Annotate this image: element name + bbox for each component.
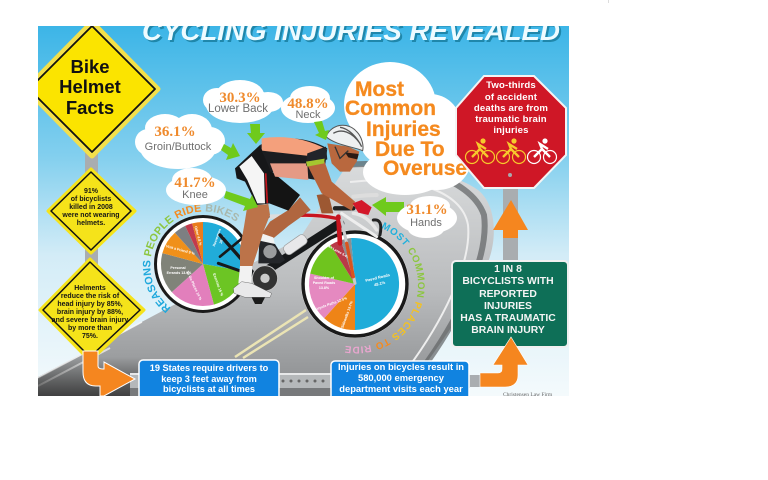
arrow: hands (372, 197, 404, 216)
curved label: most common places to ride: MOST COMMON PLACES TO RIDE (345, 222, 425, 354)
near arm (307, 160, 355, 211)
heading: most common injuries: Common (345, 97, 436, 120)
bike frame (218, 195, 381, 283)
callout: hands (397, 196, 457, 238)
stop sign: injuries (493, 125, 529, 136)
callout: lower back: Lower Back (208, 103, 268, 115)
green sign: REPORTED (479, 289, 537, 300)
arrow: up to stop sign (493, 200, 528, 238)
blue box: emergency visits: Injuries on bicycles result in (338, 361, 464, 372)
blue box: emergency visits (331, 361, 469, 401)
road (38, 164, 494, 396)
stop sign: Two-thirds (486, 80, 536, 91)
sign: 91 percent: helmets. (77, 220, 105, 227)
wheel pie: reasons people ride bikes: Visit a Friend 9 % (165, 244, 196, 256)
big cloud (344, 62, 471, 195)
crankset (252, 266, 278, 291)
near shorts (235, 145, 270, 205)
wheel pie: reasons people ride bikes (154, 215, 252, 313)
icon: yellow cyclist (466, 139, 494, 164)
sign: 91 percent: 91% (84, 188, 99, 195)
callout: groin (135, 114, 225, 169)
sign: helmets reduce: by more than (68, 325, 112, 332)
cyclist and bike (218, 125, 381, 304)
head (327, 143, 359, 172)
stop sign (456, 76, 566, 188)
sign: helmets reduce: and severe brain injury (52, 317, 128, 324)
stop sign: deaths are from (474, 103, 548, 114)
wheel pie: reasons people ride bikes: Recreation (212, 228, 222, 247)
heading: most common injuries: Injuries (366, 118, 441, 141)
sign: 91 percent (48, 169, 135, 253)
title: CYCLING INJURIES REVEALED (142, 16, 560, 46)
wheel pie: most common places to ride: 13.8% (319, 286, 330, 290)
sleeve (306, 147, 327, 167)
arrow: lower back (247, 124, 265, 144)
icon: white cyclist (528, 139, 556, 164)
icon: yellow cyclist 2 (496, 139, 526, 164)
heading: most common injuries: Overuse (383, 157, 467, 180)
blue box: 19 states: keep 3 feet away from (161, 374, 257, 384)
infographic (38, 0, 609, 396)
sign: helmets reduce: reduce the risk of (61, 293, 120, 300)
blue box: emergency visits: department visits each year (339, 383, 463, 394)
sign posts (85, 150, 518, 387)
callout: hands: Hands (410, 217, 442, 229)
near leg (240, 204, 270, 267)
guard rail (130, 373, 470, 396)
green sign: BRAIN INJURY (471, 325, 545, 336)
blue box: 19 states: bicyclists at all times (163, 384, 255, 394)
curved label: reasons people ride bikes: REASONS PEOPLE RIDE BIKES (142, 204, 239, 314)
credit: Christensen Law Firm (503, 392, 553, 398)
shorts far (269, 170, 300, 211)
sign: helmets reduce (40, 259, 144, 361)
jersey (260, 138, 330, 180)
heading: most common injuries (345, 78, 467, 180)
title (143, 26, 562, 42)
sign: bike helmet facts: Bike (70, 56, 110, 77)
stop sign: traumatic brain (475, 114, 547, 125)
sign: helmets reduce: brain injury by 88%, (57, 309, 123, 316)
wheel pie: most common places to ride: Shoulder of (314, 276, 335, 280)
callout: lower back: 30.3% (219, 90, 261, 106)
sign: helmets reduce: head injury by 85%, (57, 301, 123, 308)
green sign: BICYCLISTS WITH (462, 276, 554, 287)
sign: bike helmet facts: Helmet (59, 76, 121, 97)
heading: most common injuries: Due To (375, 138, 445, 161)
callout: knee (166, 168, 226, 205)
title: CYCLING INJURIES REVEALED (144, 18, 562, 48)
callout: neck: Neck (295, 109, 321, 121)
sign: 91 percent: killed in 2008 (69, 204, 113, 211)
wheel pie: most common places to ride: 48.1% (374, 280, 386, 287)
sign: 91 percent: were not wearing (61, 212, 120, 219)
heading: most common injuries: Most (355, 78, 404, 101)
water bottle (283, 234, 308, 255)
far arm (317, 193, 333, 213)
wheel pie: reasons people ride bikes: To Go Places 14 % (185, 270, 203, 302)
callout: groin: 36.1% (154, 124, 196, 140)
stop sign: of accident (485, 92, 538, 103)
wheel pie: reasons people ride bikes: Personal (170, 266, 186, 270)
green sign (452, 261, 568, 347)
wheel pie: reasons people ride bikes: Errands 13.9% (167, 271, 192, 275)
wheel pie: most common places to ride (301, 230, 409, 338)
sign: bike helmet facts: Facts (66, 97, 114, 118)
callout: knee: 41.7% (174, 175, 216, 191)
callout: hands: 31.1% (406, 202, 448, 218)
callout: groin: Groin/Buttock (145, 141, 212, 153)
wheel pie: reasons people ride bikes: Other 4.8 % (193, 226, 203, 247)
sign: 91 percent: of bicyclists (71, 196, 111, 203)
glove (353, 200, 372, 215)
sign: helmets reduce: Helments (74, 285, 106, 292)
blue box: 19 states: 19 States require drivers to (150, 363, 269, 373)
wheel pie: reasons people ride bikes: Exercise 15 % (212, 273, 224, 297)
green sign: INJURIES (484, 301, 532, 312)
green sign: 1 IN 8 (494, 264, 522, 275)
wheel pie: most common places to ride: Sidewalks 13.7% (340, 300, 354, 329)
far leg (262, 197, 311, 238)
green sign: HAS A TRAUMATIC (460, 313, 556, 324)
callout: neck (281, 86, 335, 123)
callout: neck: 48.8% (287, 96, 329, 112)
blue box: 19 states (139, 360, 279, 400)
sign: helmets reduce: 75%. (82, 333, 98, 340)
helmet (326, 125, 363, 151)
callout: knee: Knee (182, 189, 208, 201)
arrow: groin (221, 143, 240, 160)
arrow: orange to blue box (83, 351, 135, 396)
blue box: emergency visits: 580,000 emergency (358, 372, 445, 383)
wheel pie: most common places to ride: Bicycle Paths 12.5% (314, 296, 348, 312)
arrow: knee (224, 191, 258, 211)
arrow: neck (314, 121, 329, 140)
wheel pie: most common places to ride: Paved Roads (365, 272, 391, 283)
arrow: orange up to green sign (480, 337, 528, 387)
wheel pie: most common places to ride: Paved Roads (313, 281, 335, 285)
wheel pie: most common places to ride: Bike Lanes 5.4% (325, 243, 350, 260)
far shoe (258, 233, 285, 263)
sign: bike helmet facts (26, 22, 158, 156)
callout: lower back (203, 80, 283, 123)
near shoe (233, 282, 272, 304)
wheel pie: reasons people ride bikes: 26 % (219, 234, 226, 244)
